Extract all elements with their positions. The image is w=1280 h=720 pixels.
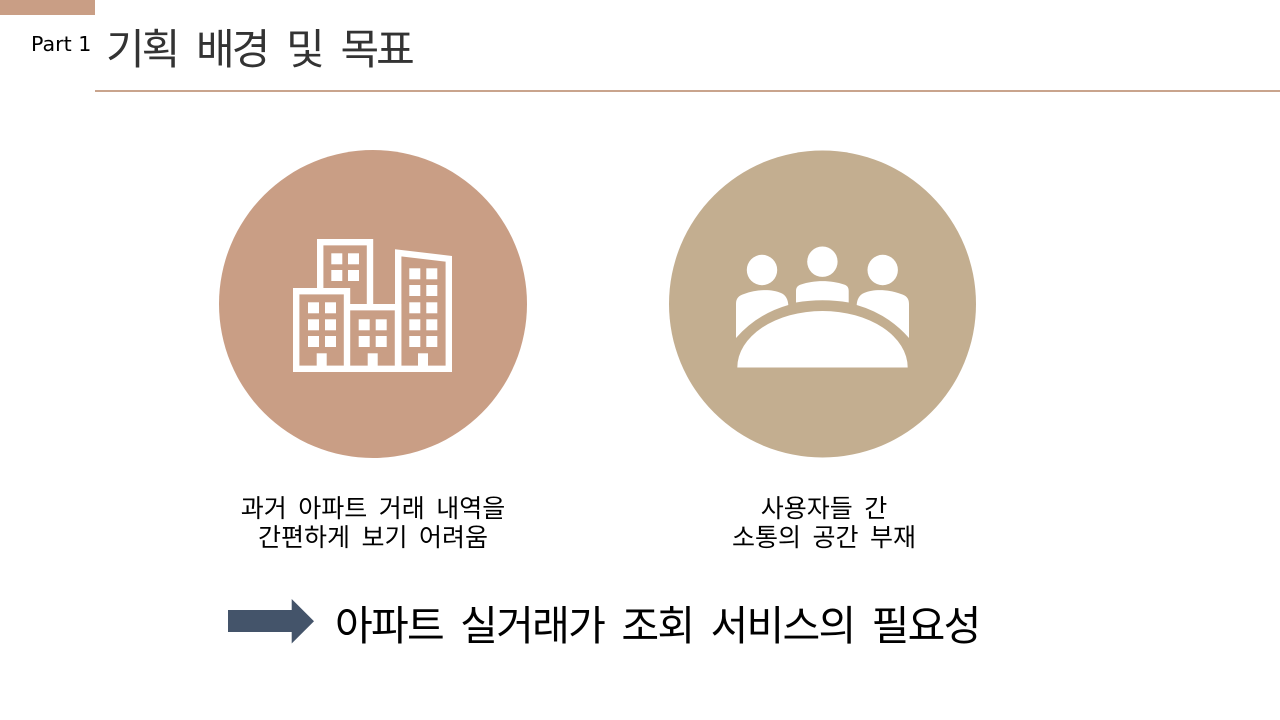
caption: apartment history: 간편하게 보기 어려움	[258, 518, 488, 554]
part label: Part 1	[31, 32, 91, 56]
caption: apartment history	[241, 489, 505, 554]
caption: no community space: 사용자들 간	[761, 489, 887, 525]
caption: no community space: 소통의 공간 부재	[732, 518, 916, 554]
caption: no community space	[732, 489, 916, 554]
caption: apartment history: 과거 아파트 거래 내역을	[241, 489, 505, 525]
title rule	[95, 90, 1280, 92]
title: 기획 배경 및 목표	[106, 16, 412, 77]
accent bar	[0, 0, 95, 15]
icon: people around a table	[736, 247, 909, 368]
conclusion statement: 아파트 실거래가 조회 서비스의 필요성	[335, 592, 980, 652]
icon: apartment buildings	[296, 242, 449, 369]
